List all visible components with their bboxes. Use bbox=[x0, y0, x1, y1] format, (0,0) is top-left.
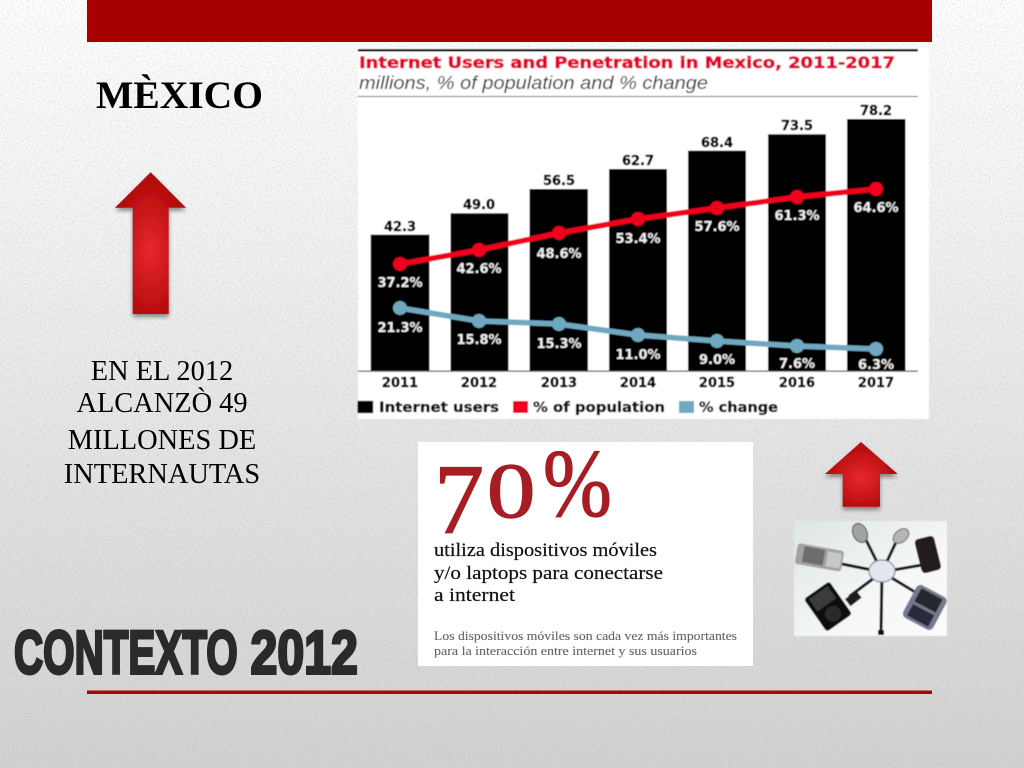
stat footnote: para la interacción entre internet y sus usuarios bbox=[434, 644, 697, 658]
percent labels on bars: 6.3% bbox=[858, 358, 894, 373]
big 70% figure: % bbox=[543, 431, 612, 537]
chart subtitle: millions, % of population and % change bbox=[359, 73, 708, 93]
big 70% figure: 0 bbox=[487, 449, 535, 535]
legend: % change bbox=[699, 400, 778, 416]
device: black phone right bbox=[914, 535, 942, 574]
bar value labels: 62.7 bbox=[622, 154, 654, 169]
usb plug bbox=[845, 591, 862, 606]
legend: Internet users bbox=[379, 400, 499, 416]
text block: internet users 2012: ALCANZÒ 49 bbox=[76, 386, 248, 419]
bar value labels: 42.3 bbox=[384, 220, 416, 235]
x axis years: 2013 bbox=[541, 376, 577, 391]
title: Contexto 2012 bbox=[14, 618, 358, 688]
hub bbox=[869, 560, 895, 582]
bar chart: internet users bbox=[371, 119, 906, 371]
big 70% figure: 7 bbox=[434, 444, 484, 555]
big 70% figure bbox=[434, 431, 612, 555]
legend bbox=[358, 400, 778, 416]
title: Contexto 2012: CONTEXTO bbox=[14, 619, 238, 688]
bottom red rule bbox=[87, 690, 932, 694]
photo: mobile devices connected to a hub bbox=[794, 521, 948, 636]
top red banner bbox=[87, 0, 932, 42]
text block: internet users 2012: EN EL 2012 bbox=[91, 356, 233, 387]
chart title: Internet Users and Penetration in Mexico, 2011-2017 bbox=[359, 53, 895, 72]
panel: internet users chart bbox=[358, 48, 929, 419]
device: headset left bbox=[849, 521, 871, 545]
bar value labels: 73.5 bbox=[781, 119, 813, 134]
percent labels on bars: 15.8% bbox=[456, 333, 502, 348]
percent labels on bars: 57.6% bbox=[694, 220, 740, 235]
title: Contexto 2012: 2012 bbox=[250, 618, 358, 687]
x axis years: 2017 bbox=[858, 376, 894, 391]
percent labels on bars: 61.3% bbox=[774, 209, 820, 224]
bar value labels: 56.5 bbox=[543, 174, 575, 189]
device: headset right bbox=[890, 526, 912, 546]
text block: internet users 2012: MILLONES DE bbox=[68, 425, 256, 456]
stat description: utiliza dispositivos móviles bbox=[434, 540, 657, 561]
percent labels on bars: 7.6% bbox=[779, 357, 815, 372]
bar value labels: 68.4 bbox=[701, 136, 733, 151]
stat footnote: Los dispositivos móviles son cada vez más importantes bbox=[434, 629, 737, 643]
x axis years: 2012 bbox=[461, 376, 497, 391]
icon: tall red up arrow bbox=[115, 172, 186, 314]
device: blackberry bbox=[901, 583, 948, 632]
text block: internet users 2012 bbox=[64, 356, 260, 490]
stat description bbox=[434, 540, 663, 606]
panel: 70% mobile stat bbox=[418, 431, 753, 666]
device: music player bbox=[804, 581, 852, 632]
cables bbox=[842, 540, 922, 632]
percent labels on bars: 11.0% bbox=[615, 348, 661, 363]
percent labels on bars: 9.0% bbox=[699, 353, 735, 368]
device: smartphone left bbox=[794, 543, 844, 572]
heading: México: MÈXICO bbox=[96, 73, 263, 117]
percent labels on bars: 21.3% bbox=[377, 321, 423, 336]
icon: short red up arrow bbox=[825, 442, 898, 507]
percent labels on bars: 37.2% bbox=[377, 276, 423, 291]
percent labels on bars bbox=[377, 201, 899, 373]
x axis years bbox=[382, 376, 894, 391]
bar value labels bbox=[384, 104, 892, 235]
bar value labels: 49.0 bbox=[463, 198, 495, 213]
stat description: y/o laptops para conectarse bbox=[434, 563, 663, 584]
x axis years: 2014 bbox=[620, 376, 656, 391]
bar value labels: 78.2 bbox=[860, 104, 892, 119]
line: % of population bbox=[393, 182, 883, 271]
percent labels on bars: 64.6% bbox=[853, 201, 899, 216]
stat footnote bbox=[434, 629, 737, 658]
line: % change bbox=[393, 301, 883, 356]
text block: internet users 2012: INTERNAUTAS bbox=[64, 459, 260, 490]
stat description: a internet bbox=[434, 585, 516, 606]
x axis years: 2011 bbox=[382, 376, 418, 391]
legend: % of population bbox=[533, 400, 665, 416]
x axis years: 2015 bbox=[699, 376, 735, 391]
x axis years: 2016 bbox=[779, 376, 815, 391]
percent labels on bars: 48.6% bbox=[536, 247, 582, 262]
percent labels on bars: 53.4% bbox=[615, 232, 661, 247]
percent labels on bars: 42.6% bbox=[456, 262, 502, 277]
percent labels on bars: 15.3% bbox=[536, 337, 582, 352]
